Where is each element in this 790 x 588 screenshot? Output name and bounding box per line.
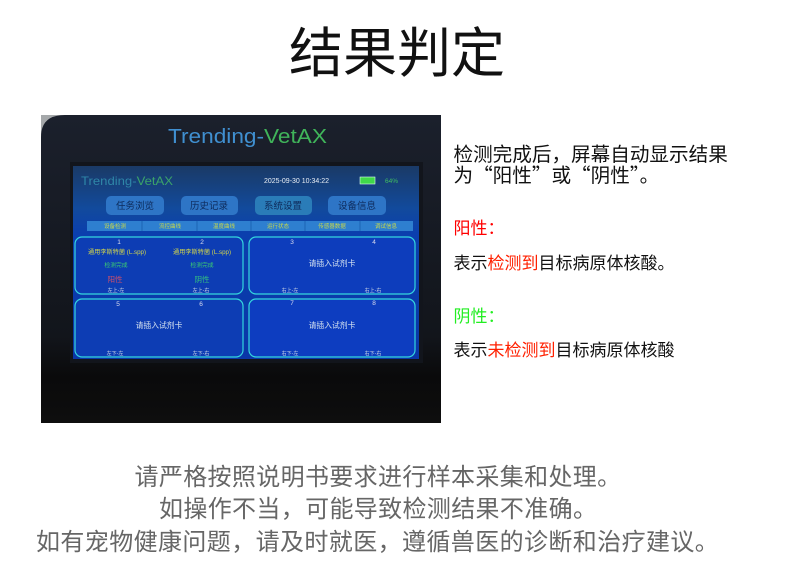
result panel: slots 1 and 2: 阴性 [194, 274, 210, 284]
screen tab bar: 运行状态 [267, 222, 289, 230]
result panel: slots 7 and 8: 7 [290, 300, 294, 307]
screen header [81, 174, 398, 188]
result panel: slots 3 and 4 [249, 237, 415, 294]
result panel: slots 3 and 4: 请插入试剂卡 [309, 258, 356, 268]
result panel: slots 5 and 6: 6 [199, 301, 203, 308]
screen tab bar: 调试信息 [375, 222, 397, 230]
result panel: slots 1 and 2: 左上-右 [193, 287, 209, 294]
result panel: slots 5 and 6: 请插入试剂卡 [136, 320, 183, 330]
result panel: slots 7 and 8: 右下-右 [365, 350, 381, 357]
result panel: slots 7 and 8 [249, 299, 415, 357]
title: 结果判定 [289, 9, 505, 88]
result panel: slots 3 and 4: 右上-右 [365, 287, 381, 294]
result panel: slots 1 and 2: 检测完成 [104, 261, 128, 269]
screen tab bar: 流控曲线 [159, 222, 181, 230]
screen header: Trending- VetAX [81, 174, 173, 188]
result panel: slots 7 and 8: 8 [372, 300, 376, 307]
screen tab bar [87, 221, 413, 231]
screen menu buttons: 历史记录 [190, 200, 228, 212]
screen tab bar: 传感器数据 [318, 222, 346, 230]
device photo: analyzer screen showing results [41, 115, 441, 423]
screen menu buttons: 任务浏览 [116, 200, 154, 212]
result panel: slots 1 and 2: 通用李斯特菌 (L.spp) [88, 248, 146, 256]
result panel: slots 1 and 2: 左上-左 [108, 287, 124, 294]
result panel: slots 1 and 2: 通用李斯特菌 (L.spp) [173, 248, 231, 256]
bottom notice line 2: 如操作不当，可能导致检测结果不准确。 [159, 489, 597, 524]
screen menu buttons [106, 196, 386, 215]
screen tab bar: 设备检测 [104, 222, 126, 230]
result panel: slots 1 and 2 [75, 237, 243, 294]
screen header: 64% [385, 178, 398, 185]
result panel: slots 1 and 2: 检测完成 [190, 261, 214, 269]
positive description: 表示检测到目标病原体核酸。 [454, 249, 674, 274]
result panel: slots 5 and 6: 5 [116, 301, 120, 308]
screen header: 2025-09-30 10:34:22 [264, 178, 329, 185]
result panel: slots 1 and 2: 2 [200, 239, 204, 246]
intro text: 检测完成后，屏幕自动显示结果 [454, 138, 728, 167]
result panel: slots 1 and 2: 阳性 [108, 274, 123, 284]
intro text: 为“阳性”或“阴性”。 [454, 159, 659, 188]
result panel: slots 7 and 8: 右下-左 [282, 350, 298, 357]
result panel: slots 5 and 6 [75, 299, 243, 357]
result panel: slots 3 and 4: 4 [372, 239, 376, 246]
screen menu buttons: 设备信息 [338, 200, 376, 212]
bottom notice line 3: 如有宠物健康问题，请及时就医，遵循兽医的诊断和治疗建议。 [36, 522, 719, 557]
positive label: 阳性： [454, 214, 504, 239]
result panel: slots 1 and 2: 1 [117, 239, 121, 246]
device brand logo: Trending- VetAX [168, 126, 327, 148]
intro text [454, 138, 728, 188]
result panel: slots 3 and 4: 3 [290, 239, 294, 246]
screen menu buttons: 系统设置 [264, 200, 302, 212]
result panel: slots 5 and 6: 左下-右 [193, 350, 209, 357]
negative description: 表示未检测到目标病原体核酸 [454, 336, 674, 361]
result panel: slots 7 and 8: 请插入试剂卡 [309, 320, 356, 330]
result panel: slots 3 and 4: 右上-左 [282, 287, 298, 294]
result panel: slots 5 and 6: 左下-左 [107, 350, 123, 357]
screen tab bar: 温度曲线 [213, 222, 235, 230]
bottom notice line 1: 请严格按照说明书要求进行样本采集和处理。 [134, 457, 622, 492]
negative label: 阴性： [454, 302, 504, 327]
